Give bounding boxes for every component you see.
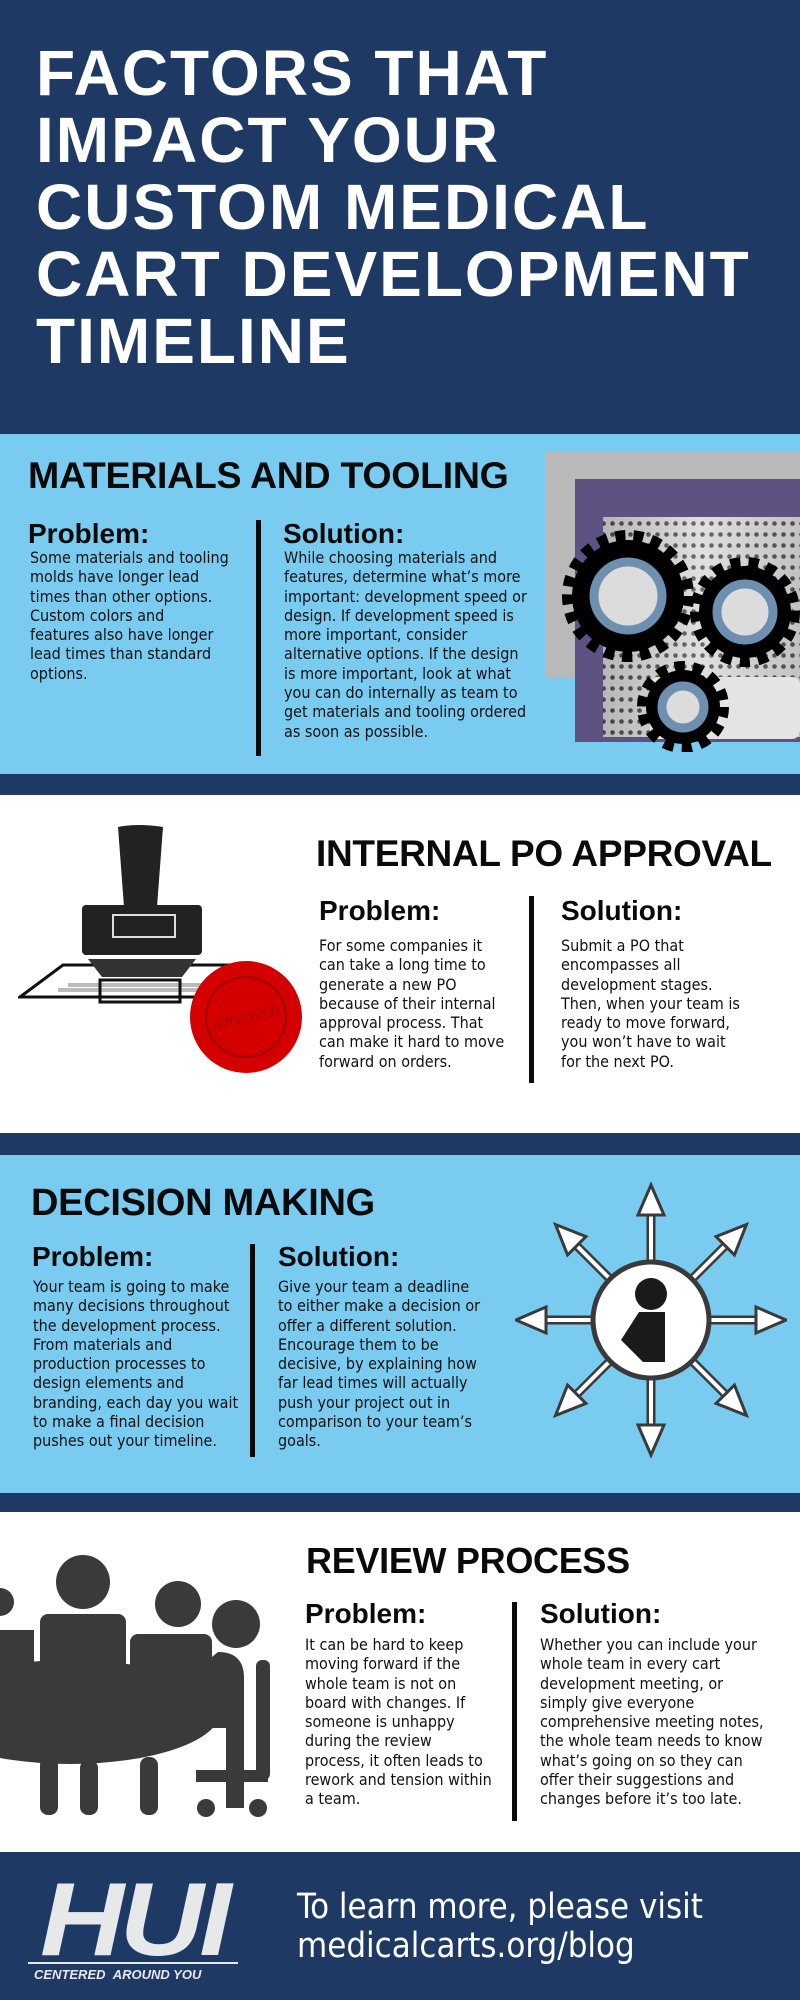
problem text: Your team is going to make [33,1277,229,1296]
problem text: can make it hard to move [319,1032,504,1051]
problem text: lead times than standard [30,644,211,663]
problem text: From materials and [33,1335,172,1354]
heading: MATERIALS AND TOOLING [28,454,508,496]
problem text [305,1635,492,1808]
solution text [560,936,740,1071]
problem text: moving forward if the [305,1654,460,1673]
header [0,0,800,434]
problem text: rework and tension within [305,1770,492,1789]
solution text: Whether you can include your [540,1635,757,1654]
panel: internal PO approval [0,795,800,1133]
problem text: process, it often leads to [305,1751,483,1770]
problem text: approval process. That [319,1013,483,1032]
solution text: you can do internally as team to [284,683,518,702]
problem text: can take a long time to [319,955,486,974]
problem text: generate a new PO [319,975,457,994]
solution text [540,1635,764,1808]
title: CART DEVELOPMENT [36,238,751,310]
problem text: pushes out your timeline. [33,1431,217,1450]
logo: HUI: HUI [40,1862,227,1978]
heading: INTERNAL PO APPROVAL [316,833,772,874]
problem text: many decisions throughout [33,1296,230,1315]
title: CUSTOM MEDICAL [36,171,649,243]
logo: HUI: CENTERED AROUND YOU [34,1967,201,1982]
solution text: as soon as possible. [284,722,428,741]
problem text: because of their internal [319,994,496,1013]
solution text: Submit a PO that [561,936,684,955]
solution text: alternative options. If the design [284,644,518,663]
solution heading: Solution: [561,895,682,926]
icon: meeting [0,1555,270,1817]
solution text: for the next PO. [561,1052,674,1071]
solution text: important: development speed or [284,587,527,606]
solution text: features, determine what’s more [284,567,521,586]
solution text: simply give everyone [540,1693,694,1712]
problem text: forward on orders. [319,1052,452,1071]
problem text: branding, each day you wait [33,1393,238,1412]
solution text: offer their suggestions and [540,1770,734,1789]
problem text: For some companies it [319,936,482,955]
solution text: what’s going on so they can [540,1751,743,1770]
solution text: the whole team needs to know [540,1731,762,1750]
problem text [319,936,504,1071]
problem text: molds have longer lead [30,567,199,586]
problem text: during the review [305,1731,432,1750]
solution text: changes before it’s too late. [540,1789,742,1808]
solution text: whole team in every cart [540,1654,720,1673]
problem text: someone is unhappy [305,1712,455,1731]
solution text: is more important, look at what [284,664,511,683]
problem text [33,1277,238,1450]
solution heading: Solution: [283,518,404,549]
solution text: Give your team a deadline [278,1277,469,1296]
solution text: offer a different solution. [278,1316,457,1335]
solution text: push your project out in [278,1393,450,1412]
heading: DECISION MAKING [31,1182,375,1224]
title [36,37,751,377]
icon: decision arrows [515,1181,787,1459]
icon: wax seal [190,961,302,1073]
solution text: ready to move forward, [561,1013,730,1032]
heading: REVIEW PROCESS [306,1540,630,1581]
problem text: whole team is not on [305,1674,456,1693]
problem text: the development process. [33,1316,221,1335]
problem text: Some materials and tooling [30,548,229,567]
problem text: Custom colors and [30,606,164,625]
icon: stamp [18,825,302,1073]
problem heading: Problem: [305,1598,426,1629]
title: FACTORS THAT [36,37,548,109]
panel: review process [0,1512,800,1852]
solution text [278,1277,480,1450]
panel: materials and tooling [0,434,800,774]
solution text: more important, consider [284,625,467,644]
icon: wax seal: APPROVED [211,1003,281,1032]
solution text: to either make a decision or [278,1296,480,1315]
problem text: to make a final decision [33,1412,204,1431]
solution heading: Solution: [540,1598,661,1629]
solution text: Encourage them to be [278,1335,439,1354]
problem text: It can be hard to keep [305,1635,463,1654]
problem text [30,548,229,683]
solution text: comprehensive meeting notes, [540,1712,764,1731]
problem text: production processes to [33,1354,205,1373]
solution text: comparison to your team’s [278,1412,472,1431]
solution text: While choosing materials and [284,548,497,567]
call to action text: medicalcarts.org/blog [297,1926,635,1966]
problem text: a team. [305,1789,360,1808]
solution text: you won’t have to wait [561,1032,726,1051]
solution text: design. If development speed is [284,606,514,625]
solution text: far lead times will actually [278,1373,468,1392]
problem heading: Problem: [319,895,440,926]
solution text [284,548,527,741]
problem heading: Problem: [32,1241,153,1272]
problem heading: Problem: [28,518,149,549]
solution text: goals. [278,1431,321,1450]
problem text: options. [30,664,88,683]
solution text: development stages. [561,975,713,994]
solution text: development meeting, or [540,1674,723,1693]
solution text: decisive, by explaining how [278,1354,477,1373]
title: IMPACT YOUR [36,104,500,176]
solution text: get materials and tooling ordered [284,702,526,721]
solution text: Then, when your team is [561,994,740,1013]
footer [0,1852,800,2000]
solution text: encompasses all [561,955,680,974]
title: TIMELINE [36,305,351,377]
problem text: board with changes. If [305,1693,465,1712]
call to action text: To learn more, please visit [297,1887,703,1927]
panel: decision making [0,1155,800,1493]
call to action text [296,1887,703,1966]
solution heading: Solution: [278,1241,399,1272]
problem text: design elements and [33,1373,184,1392]
problem text: features also have longer [30,625,213,644]
problem text: times than other options. [30,587,212,606]
icon: gears on metal [545,452,800,752]
